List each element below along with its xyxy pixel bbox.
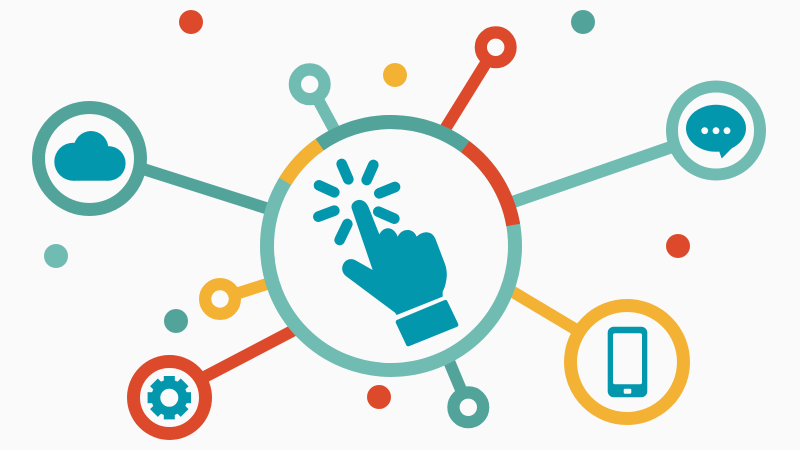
small node: light teal [295,69,325,99]
connector: cloud to hub [140,168,272,210]
connector: small light teal node to hub [310,84,335,131]
central hub ring [267,122,515,370]
connector: chat to hub [510,142,685,203]
ring arc: dark teal [320,122,465,147]
icon: smartphone [608,327,647,397]
icon: speech bubble [686,105,746,158]
click rays [318,164,395,240]
connector: gear to hub [195,328,298,382]
dot: teal lower left [164,309,188,333]
hand [342,200,447,315]
small node: dark teal [453,392,483,422]
dot: teal top right [571,10,595,34]
small node: red [481,32,511,62]
icon: clicking hand [318,164,456,344]
connector: small teal node to hub [448,360,468,407]
node: gear [134,362,206,434]
node: phone [570,306,684,418]
connector: small yellow node to hub [220,283,270,299]
dot: light teal left [44,244,68,268]
dot: yellow top [383,63,407,87]
small node: yellow [205,284,235,314]
dot: red bottom [367,385,391,409]
shirt cuff [398,302,456,344]
node: cloud [38,108,140,210]
node: chat [672,86,760,174]
icon: cloud [54,131,126,181]
dot: red right [666,234,690,258]
ring arc: red [465,147,513,225]
ring arc: yellow [285,145,320,181]
dot: red top left [179,10,203,34]
connector: small red node to hub [443,47,496,132]
icon: gear [148,376,191,419]
connector: phone to hub [508,289,585,335]
